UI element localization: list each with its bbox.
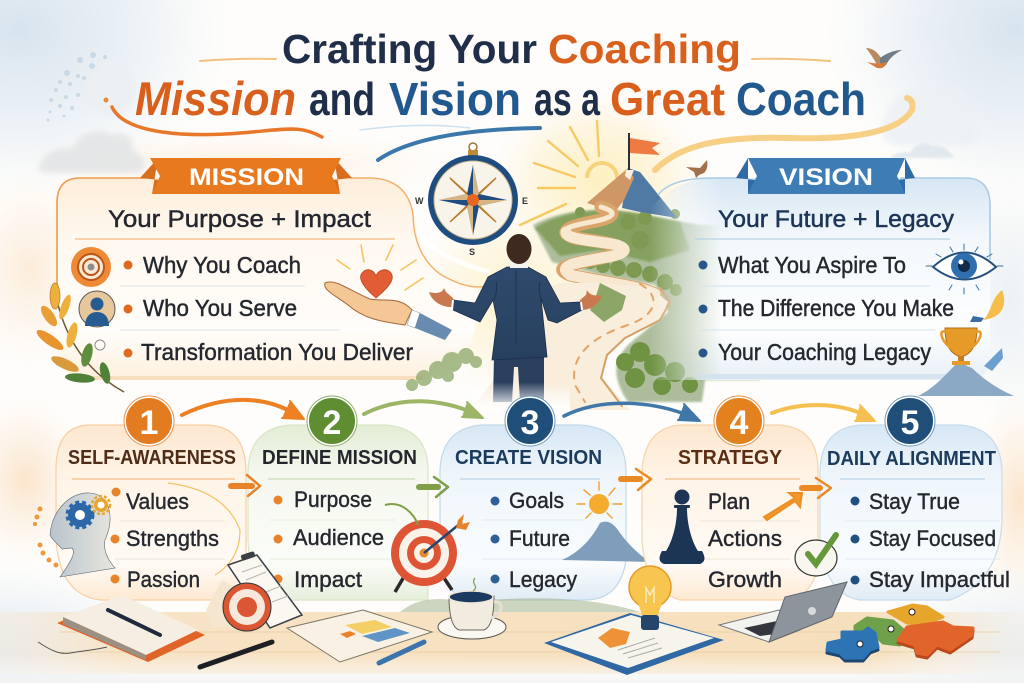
title: Coach [736, 73, 866, 125]
road [420, 207, 670, 410]
list [124, 252, 413, 365]
icon: eye [926, 244, 1003, 294]
icon: coffee cup [438, 578, 506, 639]
step 1 self-awareness: SELF-AWARENESS [68, 447, 236, 469]
title: Crafting Your [282, 26, 537, 72]
central scene: sun, mountain, road [420, 121, 760, 410]
title [135, 26, 866, 125]
arrows between steps [182, 400, 875, 498]
shadow fade [470, 382, 570, 410]
list [110, 488, 219, 592]
heading: Your Purpose + Impact [108, 206, 371, 233]
step 3 create vision: 3 [521, 404, 539, 442]
icon: head with gears [33, 493, 115, 577]
heading: Your Future + Legacy [718, 206, 954, 233]
shirt cuffs [452, 300, 582, 310]
icon: rising arrow [764, 493, 802, 520]
icon: checkmark [795, 535, 837, 576]
list: Future [509, 526, 570, 551]
central figure: coach [415, 143, 602, 410]
left hand [429, 288, 454, 307]
step 5 daily alignment: DAILY ALIGNMENT [827, 448, 996, 470]
icon: laptop [719, 582, 847, 642]
list: Strengths [126, 526, 219, 551]
flag [629, 133, 660, 170]
icon: person badge [79, 291, 115, 327]
list [850, 489, 1010, 592]
icon: small bird [686, 160, 707, 178]
list: What You Aspire To [718, 252, 906, 278]
cloud upper right [880, 88, 980, 158]
icon: puzzle pieces [827, 605, 973, 661]
list: Your Coaching Legacy [718, 339, 931, 365]
icon: light bulb [629, 566, 671, 630]
green foliage hills [533, 207, 760, 402]
list: The Difference You Make [718, 295, 954, 321]
step 5 daily alignment [820, 396, 1010, 600]
step 3 create vision: CREATE VISION [455, 447, 602, 469]
icon: compass [415, 143, 528, 257]
title: as a [534, 73, 600, 125]
icon: chess pawn [660, 490, 704, 564]
step 2 define mission: DEFINE MISSION [262, 447, 417, 469]
ribbon header: MISSION [189, 164, 304, 191]
list: Goals [509, 488, 564, 513]
icon: open book [544, 613, 724, 675]
head [506, 234, 532, 264]
step 1 self-awareness [33, 396, 246, 600]
list: Why You Coach [143, 252, 301, 278]
icon: notebook with pen [38, 595, 205, 662]
icon: target badge [71, 247, 111, 287]
decorative dots and cloud upper left [38, 52, 145, 173]
desk surface [0, 598, 1024, 683]
title: Vision [389, 73, 521, 125]
list: Plan [708, 489, 750, 514]
list: Actions [708, 526, 782, 551]
title: and [309, 73, 375, 125]
right hand [580, 290, 602, 310]
icon: trophy on mountain [918, 328, 1014, 396]
step 3 create vision [440, 396, 650, 600]
list: Impact [294, 567, 362, 592]
icon: feather [970, 290, 1004, 322]
list: Legacy [509, 567, 577, 592]
icon: gear badge [206, 580, 271, 631]
list: Stay Focused [869, 526, 996, 551]
step 4 strategy: STRATEGY [678, 447, 783, 469]
icon: clipboard [228, 551, 302, 628]
panel: vision [640, 158, 1014, 396]
neck [510, 260, 528, 268]
panel frame [57, 178, 480, 380]
title: Coaching [548, 26, 741, 72]
ribbon header [140, 158, 352, 194]
step 5 daily alignment: 5 [901, 404, 919, 442]
list: Stay Impactful [869, 567, 1010, 592]
list [708, 489, 782, 592]
list: Purpose [294, 487, 372, 512]
foreground bush [406, 348, 482, 391]
title: Mission [135, 72, 296, 125]
panel frame [640, 178, 990, 380]
title: Great [610, 73, 725, 125]
list: Audience [293, 525, 384, 550]
ribbon header: VISION [779, 164, 873, 191]
icon: laurel branch [34, 283, 124, 392]
icon: compass: E [522, 196, 528, 206]
suit jacket and arms [453, 267, 582, 360]
step 2 define mission [248, 396, 428, 600]
list: Passion [127, 567, 200, 592]
icon: arrow target on stand [385, 504, 470, 592]
icon: bird upper right [866, 48, 902, 68]
step 2 define mission: 2 [323, 404, 341, 442]
list: Stay True [869, 489, 960, 514]
list: Growth [708, 567, 782, 592]
title swooshes [112, 59, 912, 170]
jacket seams [494, 270, 541, 345]
list: Transformation You Deliver [141, 339, 413, 365]
panel: mission [34, 158, 490, 392]
trousers [493, 357, 544, 402]
icon: compass: S [469, 247, 475, 257]
ribbon header [736, 158, 915, 194]
list: Who You Serve [143, 295, 297, 321]
list: Values [126, 489, 189, 514]
step 4 strategy: 4 [730, 404, 749, 442]
icon: open planner [287, 610, 432, 662]
list [490, 488, 577, 592]
icon: heart in hand [325, 245, 452, 340]
sun with rays [520, 121, 617, 225]
mountain [587, 168, 677, 218]
icon: black pen [200, 642, 272, 667]
icon: compass: W [415, 196, 424, 206]
step cards [33, 396, 1010, 600]
list [698, 252, 954, 365]
desk objects [38, 504, 973, 675]
icon: blue pen [379, 642, 424, 663]
list [274, 487, 384, 592]
step 1 self-awareness: 1 [140, 404, 158, 442]
step 4 strategy [642, 396, 837, 600]
icon: sun over mountain [562, 482, 650, 562]
